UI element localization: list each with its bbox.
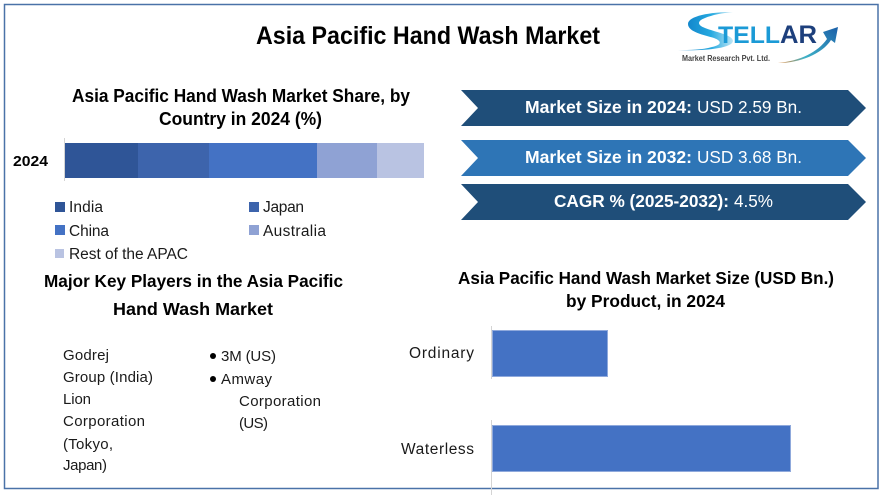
- heading: market share chart: Asia Pacific Hand Wash Market Share, by: [72, 86, 410, 106]
- heading: market share chart: [72, 86, 410, 129]
- key players list: left column: Japan): [63, 457, 107, 474]
- heading: size by product chart: [458, 268, 834, 311]
- arrow banner: market size 2024: Market Size in 2024:: [525, 97, 692, 117]
- heading: key players: [44, 271, 343, 319]
- logo: Stellar Market Research: TELL: [718, 22, 780, 49]
- legend: countries: Japan: [263, 199, 304, 216]
- key players list: right column: Corporation: [239, 393, 321, 410]
- key players list: left column: Godrej: [63, 347, 109, 364]
- legend: countries: [55, 199, 326, 263]
- key players list: left column: Corporation: [63, 413, 145, 430]
- logo: Stellar Market Research: [678, 12, 838, 63]
- key players list: right column: [210, 348, 321, 432]
- bar chart: size by product: Ordinary: [409, 345, 474, 362]
- arrow banner: market size 2024: USD 2.59 Bn.: [697, 97, 802, 117]
- heading: key players: Major Key Players in the Asia Pacific: [44, 271, 343, 291]
- logo: Stellar Market Research: AR: [780, 21, 817, 49]
- heading: size by product chart: Asia Pacific Hand Wash Market Size (USD Bn.): [458, 268, 834, 288]
- legend: countries: Rest of the APAC: [69, 246, 188, 263]
- heading: key players: Hand Wash Market: [113, 299, 273, 319]
- key players list: right column: Amway: [221, 371, 272, 388]
- stacked bar chart: share by country: 2024: [13, 153, 49, 170]
- legend: countries: India: [69, 199, 103, 216]
- heading: size by product chart: by Product, in 2024: [566, 291, 725, 311]
- key players list: right column: (US): [239, 415, 268, 432]
- key players list: left column: (Tokyo,: [63, 436, 113, 453]
- stacked bar chart: share by country: [13, 138, 424, 181]
- arrow banner: market size 2032: USD 3.68 Bn.: [697, 147, 802, 167]
- arrow banner: CAGR: 4.5%: [734, 191, 773, 211]
- arrow banner: market size 2032: [461, 140, 866, 176]
- title: Asia Pacific Hand Wash Market: [256, 22, 601, 50]
- arrow banner: market size 2024: [461, 90, 866, 126]
- legend: countries: China: [69, 223, 109, 240]
- arrow banner: CAGR: [461, 184, 866, 220]
- key players list: right column: 3M (US): [221, 348, 276, 365]
- key players list: left column: [63, 347, 153, 474]
- key players list: left column: Group (India): [63, 369, 153, 386]
- arrow banner: market size 2032: Market Size in 2032:: [525, 147, 692, 167]
- heading: market share chart: Country in 2024 (%): [159, 109, 322, 129]
- arrow banner: CAGR: CAGR % (2025-2032):: [554, 191, 729, 211]
- logo: Stellar Market Research: Market Research Pvt. Ltd.: [682, 54, 770, 63]
- bar chart: size by product: Waterless: [401, 441, 474, 458]
- bar chart: size by product: [401, 326, 790, 495]
- key players list: left column: Lion: [63, 391, 91, 408]
- legend: countries: Australia: [263, 223, 326, 240]
